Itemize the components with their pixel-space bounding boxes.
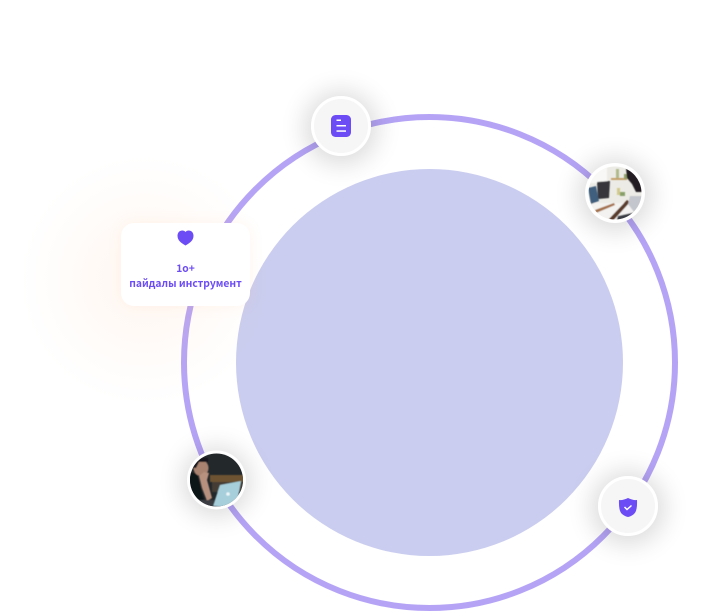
card text [129,260,242,290]
card text: пайдалы инструмент [129,275,242,290]
node: office photo [579,159,651,231]
node: document icon [305,92,377,164]
circular diagram [175,84,678,611]
icon: heart [178,230,194,246]
soft orange glow [20,155,270,405]
node: shield icon [592,472,664,544]
central disc [236,169,623,556]
icon: document [331,115,351,137]
icon: shield [619,498,637,517]
callout card [121,223,250,306]
node: person with laptop photo [182,448,250,516]
outer ring [184,117,675,608]
card text: 1o+ [176,260,195,275]
